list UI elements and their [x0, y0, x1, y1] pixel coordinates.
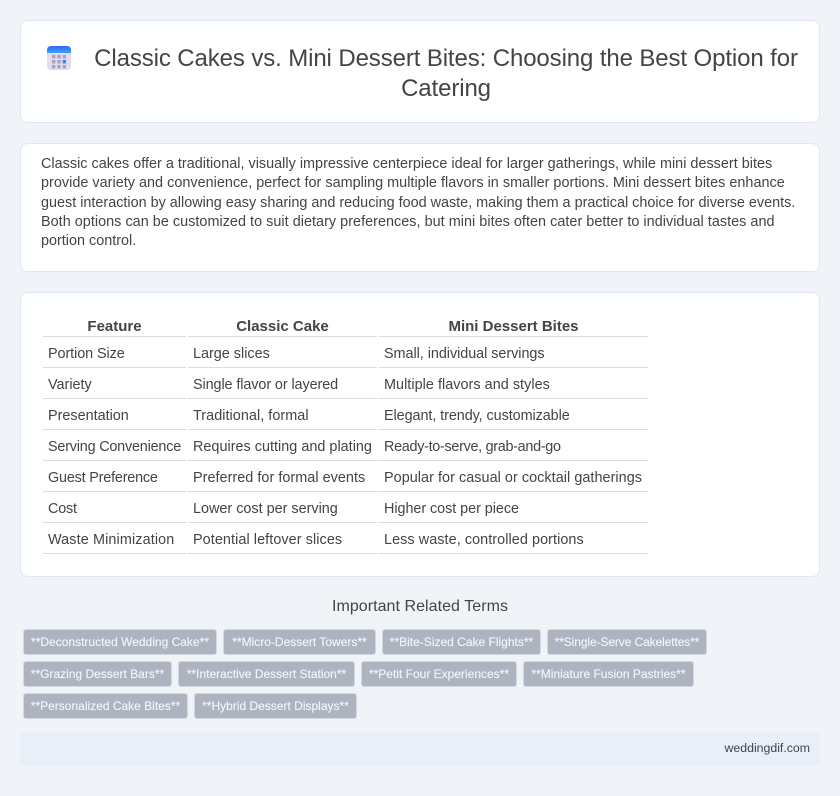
tags: related terms: **Miniature Fusion Pastries** [531, 667, 686, 681]
title: Catering [401, 75, 491, 102]
comparison table: Less waste, controlled portions [384, 532, 584, 548]
heading: related terms: Important Related Terms [332, 598, 508, 615]
panel: title card [20, 20, 820, 123]
panel: intro text [20, 143, 820, 272]
title: Classic Cakes vs. Mini Dessert Bites: Choosing the Best Option for [94, 45, 798, 72]
intro paragraph: portion control. [41, 233, 136, 249]
icon: calendar [47, 46, 71, 70]
tags: related terms: **Deconstructed Wedding Cake** [31, 635, 209, 649]
comparison table: Feature [87, 318, 142, 335]
comparison table: Single flavor or layered [193, 377, 338, 393]
comparison table: Waste Minimization [48, 532, 174, 548]
tags: related terms: **Personalized Cake Bites** [31, 699, 180, 713]
comparison table: Requires cutting and plating [193, 439, 372, 455]
comparison table: Portion Size [48, 346, 125, 362]
title [94, 45, 798, 102]
intro paragraph: guest interaction by allowing easy sharing and reducing food waste, making them a practical choice for diverse events. [41, 195, 795, 211]
comparison table: Cost [48, 501, 77, 517]
comparison table: Guest Preference [48, 470, 158, 486]
footer [20, 732, 820, 766]
tags: related terms: **Micro-Dessert Towers** [232, 635, 367, 649]
comparison table: Large slices [193, 346, 270, 362]
comparison table: Presentation [48, 408, 129, 424]
intro paragraph: provide variety and convenience, perfect for sampling multiple flavors in smaller portions. Mini dessert bites enhance [41, 175, 785, 191]
intro paragraph: Classic cakes offer a traditional, visually impressive centerpiece ideal for larger gatherings, while mini dessert bites [41, 156, 772, 172]
tags: related terms: **Interactive Dessert Station** [187, 667, 346, 681]
comparison table [43, 318, 648, 554]
comparison table: Traditional, formal [193, 408, 309, 424]
comparison table: Small, individual servings [384, 346, 545, 362]
comparison table: Variety [48, 377, 92, 393]
tags: related terms: **Bite-Sized Cake Flights** [390, 635, 533, 649]
comparison table: Popular for casual or cocktail gatherings [384, 470, 642, 486]
intro paragraph [41, 156, 795, 249]
tags: related terms: **Petit Four Experiences** [369, 667, 509, 681]
comparison table: Elegant, trendy, customizable [384, 408, 570, 424]
comparison table: Higher cost per piece [384, 501, 519, 517]
tags: related terms: **Grazing Dessert Bars** [31, 667, 164, 681]
comparison table: Multiple flavors and styles [384, 377, 550, 393]
panel: comparison table [20, 292, 820, 577]
footer source: weddingdif.com [725, 741, 810, 755]
tags: related terms: **Single-Serve Cakelettes** [555, 635, 699, 649]
comparison table: Serving Convenience [48, 439, 181, 455]
comparison table: Mini Dessert Bites [448, 318, 579, 335]
comparison table: Potential leftover slices [193, 532, 342, 548]
comparison table: Lower cost per serving [193, 501, 338, 517]
comparison table: Classic Cake [236, 318, 329, 335]
intro paragraph: Both options can be customized to suit dietary preferences, but mini bites often cater better to individual tastes and [41, 214, 775, 230]
tags: related terms [23, 629, 707, 719]
comparison table: Preferred for formal events [193, 470, 365, 486]
tags: related terms: **Hybrid Dessert Displays** [202, 699, 349, 713]
comparison table: Ready-to-serve, grab-and-go [384, 439, 561, 455]
